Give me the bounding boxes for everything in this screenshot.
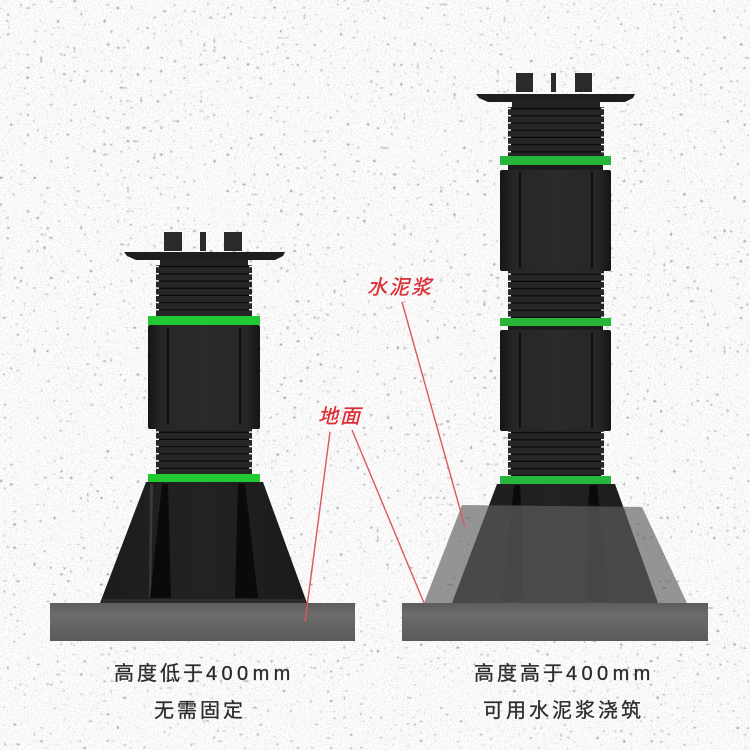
caption left line one: 高度低于400mm bbox=[114, 662, 295, 685]
head plate bbox=[124, 252, 285, 260]
collar one bbox=[500, 165, 611, 271]
leader line: cement slurry bbox=[402, 302, 465, 527]
middle thread bbox=[508, 271, 604, 318]
lower thread bbox=[156, 429, 252, 474]
collar bbox=[148, 325, 260, 429]
green ring upper bbox=[148, 316, 260, 325]
leader line: ground to left slab bbox=[305, 432, 330, 622]
caption right line two: 可用水泥浆浇筑 bbox=[483, 699, 644, 722]
label: cement slurry: 水泥浆 bbox=[367, 277, 434, 299]
green ring one bbox=[500, 156, 611, 165]
right pedestal bbox=[452, 73, 658, 603]
ground slab left bbox=[50, 603, 355, 641]
green ring lower bbox=[148, 474, 260, 482]
cement slurry overlay bbox=[424, 505, 687, 603]
ground slab right bbox=[402, 603, 708, 641]
upper thread bbox=[156, 259, 252, 317]
head plate bbox=[476, 94, 635, 102]
caption right line one: 高度高于400mm bbox=[474, 662, 655, 685]
green ring two bbox=[500, 318, 611, 326]
green ring three bbox=[500, 476, 611, 484]
label: ground: 地面 bbox=[318, 406, 363, 428]
top tabs bbox=[164, 232, 242, 251]
base cone bbox=[452, 484, 658, 603]
leader line: ground to right slab bbox=[352, 430, 424, 603]
base cone bbox=[100, 482, 307, 603]
collar two bbox=[500, 326, 611, 431]
lower thread bbox=[508, 431, 604, 477]
caption left line two: 无需固定 bbox=[154, 699, 246, 722]
upper thread bbox=[508, 101, 604, 157]
left pedestal bbox=[100, 232, 307, 603]
top tabs bbox=[516, 73, 592, 92]
